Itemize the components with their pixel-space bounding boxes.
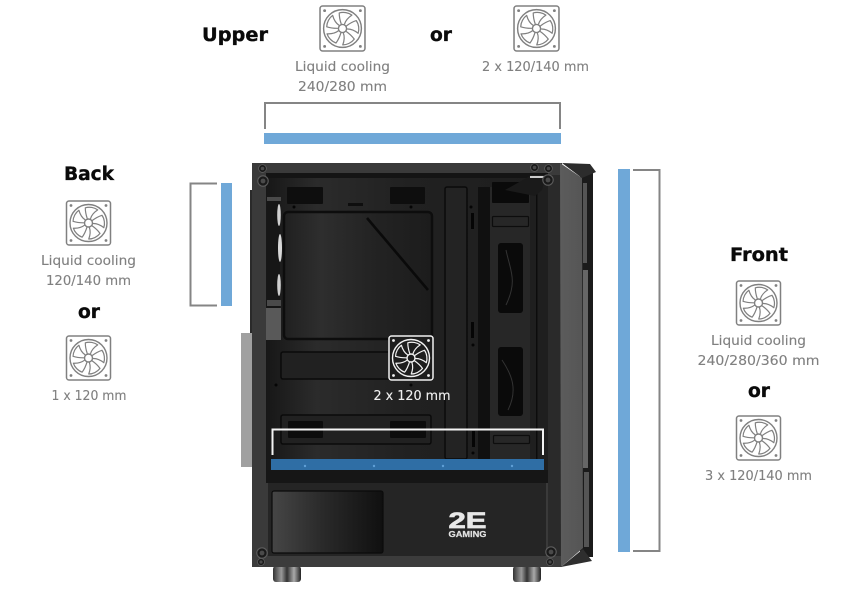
text: front liquid cooling: 240/280/360 mm [698,353,820,369]
motherboard tray window [284,212,432,339]
panel: upper [202,6,589,144]
front bracket [633,170,660,551]
or: or [78,302,101,323]
heading: Upper: Upper [202,25,269,46]
text: upper liquid cooling: 240/280 mm [298,79,387,95]
PSU shroud [266,470,548,483]
chassis [252,163,562,567]
back bracket [190,184,217,306]
rear dark side strip [580,172,593,557]
upper bracket [265,103,560,129]
icon: front fan 2 [736,416,780,460]
front rail [530,175,548,483]
logo 2E Gaming: GAMING [448,529,487,539]
text: upper liquid cooling: Liquid cooling [295,59,390,75]
text: back liquid cooling: Liquid cooling [41,253,136,269]
logo 2E Gaming: 2E [448,508,486,533]
or: or [748,381,771,402]
heading: Front: Front [730,245,788,266]
cable cutouts [492,182,529,416]
lower tray panels [281,352,431,444]
text: upper liquid cooling [295,59,390,95]
top cutouts [287,187,425,206]
logo 2E Gaming [448,508,487,539]
upper blue bar [264,133,561,144]
icon: bottom fan [388,335,434,381]
panel: bottom [271,335,544,470]
PSU window [272,491,383,553]
small holes [274,206,475,454]
text: front liquid cooling: Liquid cooling [711,333,806,349]
heading: Back: Back [64,164,115,185]
text: back liquid cooling: 120/140 mm [46,273,131,289]
icon: front fan 1 [736,281,780,325]
text: upper fans: 2 x 120/140 mm [482,59,589,75]
icon: upper fan 2 [514,6,559,51]
rear fan [266,197,282,340]
or: or [430,25,453,46]
front panel [560,163,583,567]
text: front fans: 3 x 120/140 mm [705,468,812,484]
screws [257,164,556,565]
tray diagonal [367,218,428,290]
text: bottom fans: 2 x 120 mm [374,388,450,404]
icon: upper fan 1 [320,6,365,51]
back plate [241,333,253,467]
bottom blue bar [271,459,544,470]
expansion columns [445,187,467,459]
PC case photo [241,163,596,582]
text: back liquid cooling [41,253,136,289]
text: back fan: 1 x 120 mm [52,388,126,404]
interior [266,175,548,483]
front blue bar [618,169,630,552]
panel: back [41,164,232,404]
text: front liquid cooling [698,333,820,369]
icon: back fan 1 [66,201,110,245]
icon: back fan 2 [66,336,110,380]
feet [273,566,541,582]
back blue bar [221,183,232,306]
bottom bracket [272,430,543,455]
panel: front [618,169,820,552]
